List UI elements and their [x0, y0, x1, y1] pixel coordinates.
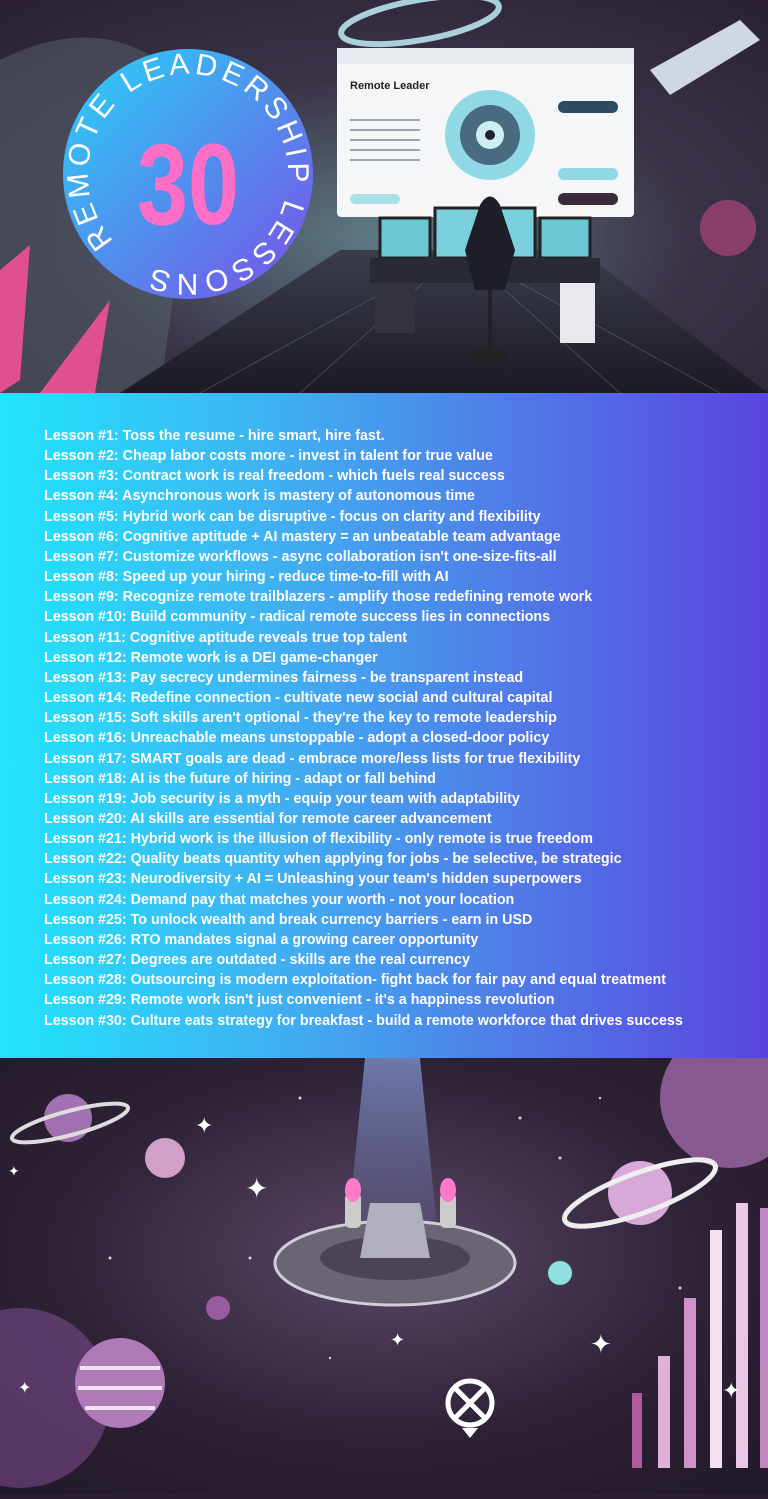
text block: 30 lessons: [44, 428, 683, 1029]
text block: 30 lessons: Lesson #14: Redefine connection - cultivate new social and cultural capital: [44, 690, 552, 706]
text block: 30 lessons: Lesson #9: Recognize remote trailblazers - amplify those redefining remote work: [44, 589, 592, 605]
panel: lessons list: [0, 393, 768, 1058]
text block: 30 lessons: Lesson #5: Hybrid work can be disruptive - focus on clarity and flexibility: [44, 509, 541, 525]
dashboard window: [337, 48, 634, 217]
planets: [9, 1094, 131, 1150]
text block: 30 lessons: Lesson #20: AI skills are essential for remote career advancement: [44, 811, 492, 827]
sparkles: [8, 1113, 740, 1403]
text block: 30 lessons: Lesson #23: Neurodiversity + AI = Unleashing your team's hidden superpowers: [44, 871, 582, 887]
text block: 30 lessons: Lesson #12: Remote work is a DEI game-changer: [44, 650, 378, 666]
sparkles: ✦: [722, 1378, 740, 1403]
text block: 30 lessons: Lesson #30: Culture eats strategy for breakfast - build a remote workforce that drives success: [44, 1013, 683, 1029]
text block: 30 lessons: Lesson #17: SMART goals are dead - embrace more/less lists for true flexibility: [44, 750, 580, 766]
sparkles: ✦: [195, 1113, 213, 1138]
text block: 30 lessons: Lesson #29: Remote work isn't just convenient - it's a happiness revolution: [44, 992, 554, 1008]
text block: 30 lessons: Lesson #25: To unlock wealth and break currency barriers - earn in USD: [44, 912, 532, 928]
panel: top illustration: [0, 0, 768, 393]
text block: 30 lessons: Lesson #6: Cognitive aptitude + AI mastery = an unbeatable team advantage: [44, 529, 561, 545]
sparkles: ✦: [8, 1163, 20, 1179]
badge: 30 remote leadership lessons: 30: [137, 121, 239, 249]
text block: 30 lessons: Lesson #3: Contract work is real freedom - which fuels real success: [44, 468, 505, 484]
text block: 30 lessons: Lesson #28: Outsourcing is modern exploitation- fight back for fair pay and equal treatment: [44, 972, 666, 988]
leaves: [0, 245, 110, 393]
text block: 30 lessons: Lesson #15: Soft skills aren't optional - they're the key to remote leadership: [44, 710, 557, 726]
panel: bottom illustration: [0, 1058, 768, 1488]
badge: 30 remote leadership lessons: REMOTE LEADERSHIP LESSONS: [67, 54, 309, 295]
text block: 30 lessons: Lesson #10: Build community - radical remote success lies in connections: [44, 609, 550, 625]
dashboard window: Remote Leader: [350, 80, 430, 92]
ship: [275, 1178, 515, 1305]
text block: 30 lessons: Lesson #1: Toss the resume - hire smart, hire fast.: [44, 428, 385, 444]
text block: 30 lessons: Lesson #16: Unreachable means unstoppable - adopt a closed-door policy: [44, 730, 549, 746]
text block: 30 lessons: Lesson #19: Job security is a myth - equip your team with adaptability: [44, 791, 520, 807]
sparkles: ✦: [390, 1330, 405, 1350]
sparkles: ✦: [18, 1380, 31, 1397]
text block: 30 lessons: Lesson #22: Quality beats quantity when applying for jobs - be selective, be strategic: [44, 851, 622, 867]
text block: 30 lessons: Lesson #27: Degrees are outdated - skills are the real currency: [44, 952, 470, 968]
bar chart: [632, 1203, 768, 1468]
text block: 30 lessons: Lesson #18: AI is the future of hiring - adapt or fall behind: [44, 771, 436, 787]
sparkles: ✦: [245, 1173, 268, 1204]
text block: 30 lessons: Lesson #11: Cognitive aptitude reveals true top talent: [44, 630, 407, 646]
text block: 30 lessons: Lesson #21: Hybrid work is the illusion of flexibility - only remote is true freedom: [44, 831, 593, 847]
icon: logo: [448, 1381, 492, 1438]
text block: 30 lessons: Lesson #8: Speed up your hiring - reduce time-to-fill with AI: [44, 569, 449, 585]
text block: 30 lessons: Lesson #13: Pay secrecy undermines fairness - be transparent instead: [44, 670, 523, 686]
text block: 30 lessons: Lesson #4: Asynchronous work is mastery of autonomous time: [44, 488, 475, 504]
text block: 30 lessons: Lesson #24: Demand pay that matches your worth - not your location: [44, 892, 514, 908]
text block: 30 lessons: Lesson #7: Customize workflows - async collaboration isn't one-size-fits-all: [44, 549, 557, 565]
text block: 30 lessons: Lesson #26: RTO mandates signal a growing career opportunity: [44, 932, 478, 948]
desk and person: [370, 196, 600, 360]
sparkles: ✦: [590, 1329, 612, 1359]
text block: 30 lessons: Lesson #2: Cheap labor costs more - invest in talent for true value: [44, 448, 493, 464]
